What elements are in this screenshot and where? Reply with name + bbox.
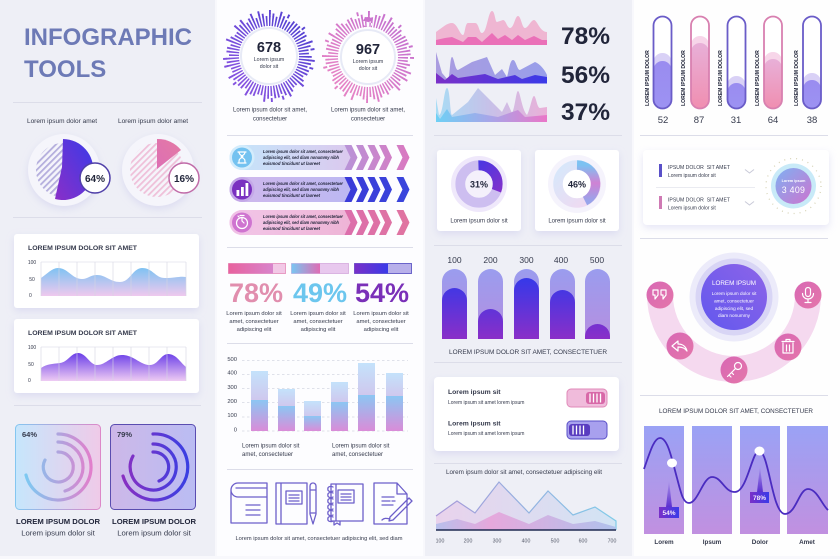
icon: quote: [646, 282, 674, 308]
pie chart 64%: 64%: [85, 174, 105, 185]
gauge 38: [794, 16, 821, 126]
stacked bar chart: 500: [227, 357, 237, 363]
wave column chart: Ipsum: [703, 539, 722, 546]
gauge 31: LOREM IPSUM DOLOR: [718, 50, 724, 106]
capsule bar chart: 300: [519, 255, 534, 265]
radial burst 967: [324, 13, 412, 122]
central circle: Lorem ipsum dolor sit: [712, 291, 757, 296]
icon: key: [720, 356, 748, 384]
gauge 87: [681, 16, 709, 126]
wave column chart: Amet: [799, 539, 816, 546]
gauge 64: LOREM IPSUM DOLOR: [755, 50, 761, 106]
stat 49%: Lorem ipsum dolor sit: [290, 311, 346, 317]
icon: microphone: [794, 282, 822, 308]
mountain area chart: 400: [522, 538, 530, 544]
arrow bar 1: [229, 145, 410, 170]
donut card 31%: 31%: [470, 180, 488, 190]
area sparkline 56%: [436, 52, 610, 89]
callout 78%: 78%: [753, 495, 766, 502]
counter badge: [766, 158, 821, 214]
icon: trash: [774, 334, 802, 360]
panel: radial progress 64%: LOREM IPSUM DOLOR: [16, 517, 101, 526]
panel: radial progress 79%: [110, 424, 197, 538]
panel: radial progress 79%: 79%: [117, 430, 132, 439]
gauge 38: 38: [807, 115, 817, 126]
capsule gauges: [645, 16, 821, 126]
capsule bar chart: 400: [554, 255, 568, 265]
stacked bar chart: 300: [227, 385, 237, 391]
icon: document and pen: [374, 483, 412, 524]
toggle off: [567, 421, 607, 439]
wave column chart: Dolor: [752, 539, 769, 546]
callout 54%: 54%: [662, 510, 676, 517]
radial burst 967: Lorem ipsum: [353, 59, 384, 65]
donut card 46%: [535, 150, 619, 231]
toggle card: Lorem ipsum sit amet lorem ipsum: [448, 400, 524, 406]
panel: area chart card 2: 50: [28, 362, 34, 368]
radial burst 678: Lorem ipsum dolor sit amet,: [233, 108, 307, 114]
panel: radial progress 79%: Lorem ipsum dolor sit: [117, 528, 192, 538]
stacked bar chart: 400: [227, 370, 237, 376]
area sparkline 37%: [436, 88, 610, 126]
donut card 46%: 46%: [568, 180, 586, 190]
stacked bar chart: 100: [227, 413, 237, 419]
arrow bar 2: [229, 177, 410, 202]
radial burst 678: dolor sit: [260, 64, 279, 70]
radial burst 967: dolor sit: [359, 66, 378, 72]
panel: area chart card 1: LOREM IPSUM DOLOR SIT AMET: [28, 245, 137, 252]
panel: area chart card 2: 100: [28, 345, 36, 351]
radial burst 678: consectetuer: [253, 116, 287, 122]
stacked bar chart: amet, consectetuer: [242, 452, 293, 458]
pie chart 64%: [27, 118, 110, 206]
mountain area chart: 500: [551, 538, 559, 544]
radial burst 967: Lorem ipsum dolor sit amet,: [331, 108, 405, 114]
counter badge: Lorem ipsum: [782, 179, 806, 183]
radial burst 678: Lorem ipsum: [254, 57, 285, 63]
capsule bar chart: 500: [590, 255, 604, 265]
stat 78%: [226, 264, 286, 333]
toggle on: [567, 389, 607, 407]
mountain area chart: 700: [608, 538, 616, 544]
stat 49%: adipiscing elit: [301, 327, 336, 333]
callout 78%: [750, 446, 769, 503]
stacked bar chart: amet, consectetuer: [332, 452, 383, 458]
bar 3 text: adipiscing elit, sed diam nonummy nibh: [263, 220, 339, 225]
list card with counter: [643, 150, 829, 225]
list card with counter: IPSUM DOLOR SIT AMET: [668, 165, 730, 171]
mountain area chart: 600: [579, 538, 587, 544]
gauge 52: LOREM IPSUM DOLOR: [645, 50, 651, 106]
icon: stopwatch: [238, 216, 244, 223]
panel: area chart card 1: [14, 234, 199, 308]
stacked bar chart: [227, 357, 408, 458]
gauge 64: [755, 16, 782, 126]
bar 2 text: [263, 181, 343, 198]
panel: radial progress 79%: LOREM IPSUM DOLOR: [112, 517, 197, 526]
radial burst 678: 678: [257, 40, 281, 56]
caption: Lorem ipsum dolor sit amet, consectetuer adipiscing elit, sed diam: [236, 536, 403, 542]
wave column chart: [644, 408, 828, 546]
radial burst 967: 967: [356, 42, 380, 58]
capsule bar chart: LOREM IPSUM DOLOR SIT AMET, CONSECTETUER: [449, 349, 607, 356]
panel: area chart card 2: LOREM IPSUM DOLOR SIT AMET: [28, 330, 137, 337]
gauge 38: LOREM IPSUM DOLOR: [794, 50, 800, 106]
central circle: amet, consectetuer: [714, 298, 754, 304]
icon: hourglass: [238, 152, 246, 163]
bar 1 text: euismod tincidunt ut laoreet: [263, 161, 321, 166]
stacked bar chart: Lorem ipsum dolor sit: [332, 444, 390, 450]
panel: radial progress 64%: [16, 424, 101, 538]
toggle card: Lorem ipsum sit amet lorem ipsum: [448, 431, 524, 437]
stacked bar chart: Lorem ipsum dolor sit: [242, 444, 300, 450]
gauge 87: LOREM IPSUM DOLOR: [681, 50, 687, 106]
panel: area chart card 1: 0: [29, 293, 32, 299]
stat 78%: Lorem ipsum dolor sit: [226, 311, 282, 317]
gauge 31: [718, 16, 746, 126]
donut card 31%: Lorem ipsum dolor sit: [450, 218, 508, 224]
panel: pie charts: [27, 118, 199, 206]
list card with counter: IPSUM DOLOR SIT AMET: [668, 198, 730, 204]
arrow bar 3: [229, 210, 410, 235]
stat 54%: [353, 264, 412, 333]
icon: bar chart: [236, 183, 248, 196]
gauge 87: 87: [694, 115, 704, 126]
wave column chart: LOREM IPSUM DOLOR SIT AMET, CONSECTETUER: [659, 408, 814, 415]
pie chart 16%: [118, 118, 199, 206]
title: INFOGRAPHIC: [24, 24, 192, 51]
gauge 64: 64: [768, 115, 778, 126]
gauge 31: 31: [731, 115, 741, 126]
central circle: diam nonummy: [718, 313, 751, 318]
stat 54%: 54%: [355, 278, 409, 308]
central circle: LOREM IPSUM: [712, 280, 756, 287]
donut card 31%: [437, 150, 521, 231]
stat 54%: adipiscing elit: [364, 327, 399, 333]
area sparkline 56%: 56%: [561, 62, 610, 89]
pie chart 16%: 16%: [174, 174, 194, 185]
bar 1 text: adipiscing elit, sed diam nonummy nibh: [263, 155, 339, 160]
list card with counter: Lorem ipsum dolor sit: [668, 206, 716, 212]
gauge 52: [645, 16, 672, 126]
bar 2 text: adipiscing elit, sed diam nonummy nibh: [263, 187, 339, 192]
list card with counter: Lorem ipsum dolor sit: [668, 173, 716, 179]
bar 2 text: euismod tincidunt ut laoreet: [263, 193, 321, 198]
icon: reply arrow: [666, 332, 694, 360]
bar 2 text: Lorem ipsum dolor sit amet, consectetuer: [263, 181, 343, 186]
wave column chart: Lorem: [654, 539, 674, 546]
title: [24, 24, 192, 83]
gauge 52: 52: [658, 115, 668, 126]
bar 1 text: [263, 149, 343, 166]
capsule bar chart: 100: [447, 255, 462, 265]
panel: area chart card 2: [14, 319, 199, 393]
counter badge: 3 409: [782, 185, 805, 195]
semicircle diagram: [646, 252, 822, 384]
mountain area chart: 100: [436, 538, 444, 544]
panel: area chart card 1: 50: [29, 277, 35, 283]
mountain area chart: 200: [464, 538, 472, 544]
central circle: [690, 252, 778, 342]
toggle card: Lorem ipsum sit: [448, 389, 501, 396]
panel: area chart card 1: 100: [28, 260, 36, 266]
stacked bar chart: 0: [234, 428, 237, 434]
panel: area chart card 2: 0: [28, 378, 31, 384]
capsule bar chart: 200: [483, 255, 498, 265]
stat 54%: amet, consectetuer: [356, 319, 406, 325]
area sparkline 78%: [436, 11, 610, 50]
panel: radial progress 64%: Lorem ipsum dolor sit: [21, 528, 96, 538]
toggle card: Lorem ipsum sit: [448, 420, 501, 428]
mountain area chart: Lorem ipsum dolor sit amet, consectetuer adipiscing elit: [446, 469, 602, 476]
icon: book: [231, 483, 267, 523]
stacked bar chart: 200: [227, 399, 237, 405]
panel: radial progress 64%: 64%: [22, 430, 37, 439]
stat 49%: amet, consectetuer: [293, 319, 343, 325]
bar 3 text: [263, 214, 343, 231]
central circle: adipiscing elit, sed: [715, 306, 754, 311]
icon: notebook and pencil: [276, 483, 316, 524]
pie chart 16%: Lorem ipsum dolor amet: [118, 118, 188, 125]
area sparkline 78%: 78%: [561, 23, 610, 50]
stat 78%: amet, consectetuer: [229, 319, 279, 325]
bar 3 text: euismod tincidunt ut laoreet: [263, 226, 321, 231]
stat 49%: 49%: [293, 278, 347, 308]
capsule bar chart: [442, 255, 610, 356]
mountain area chart: [436, 469, 616, 544]
area sparkline 37%: 37%: [561, 99, 610, 126]
stat 49%: [290, 264, 348, 333]
pie chart 64%: Lorem ipsum dolor amet: [27, 118, 97, 125]
callout 54%: [659, 458, 679, 518]
bar 1 text: Lorem ipsum dolor sit amet, consectetuer: [263, 149, 343, 154]
stat 78%: 78%: [229, 278, 283, 308]
title: TOOLS: [24, 56, 106, 83]
toggle card: [434, 377, 619, 451]
icon: spiral notebook: [328, 484, 363, 525]
donut card 46%: Lorem ipsum dolor sit: [548, 218, 606, 224]
stat 54%: Lorem ipsum dolor sit: [353, 311, 409, 317]
radial burst 967: consectetuer: [351, 116, 385, 122]
stat 78%: adipiscing elit: [237, 327, 272, 333]
mountain area chart: 300: [493, 538, 501, 544]
bar 3 text: Lorem ipsum dolor sit amet, consectetuer: [263, 214, 343, 219]
radial burst 678: [225, 12, 313, 122]
